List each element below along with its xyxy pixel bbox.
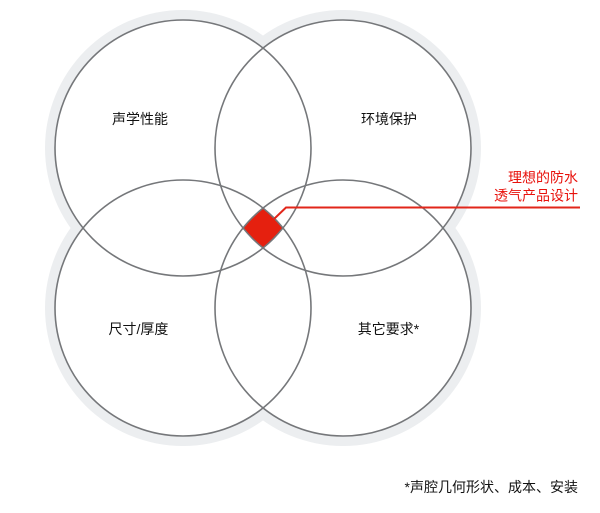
label: environmental protection: 环境保护	[361, 111, 417, 127]
callout text: 透气产品设计	[494, 188, 578, 204]
grey halo outline	[45, 10, 481, 446]
callout leader line	[274, 208, 580, 219]
label: size and thickness: 尺寸/厚度	[109, 321, 168, 337]
callout text	[494, 170, 578, 204]
callout text: 理想的防水	[508, 170, 578, 186]
label: other requirements: 其它要求*	[358, 321, 420, 337]
footnote: *声腔几何形状、成本、安装	[405, 479, 578, 495]
white circle fills	[55, 20, 471, 436]
circle outlines	[55, 20, 471, 436]
red centre intersection	[243, 208, 283, 248]
label: acoustic performance: 声学性能	[112, 111, 168, 127]
venn diagram	[45, 10, 481, 446]
